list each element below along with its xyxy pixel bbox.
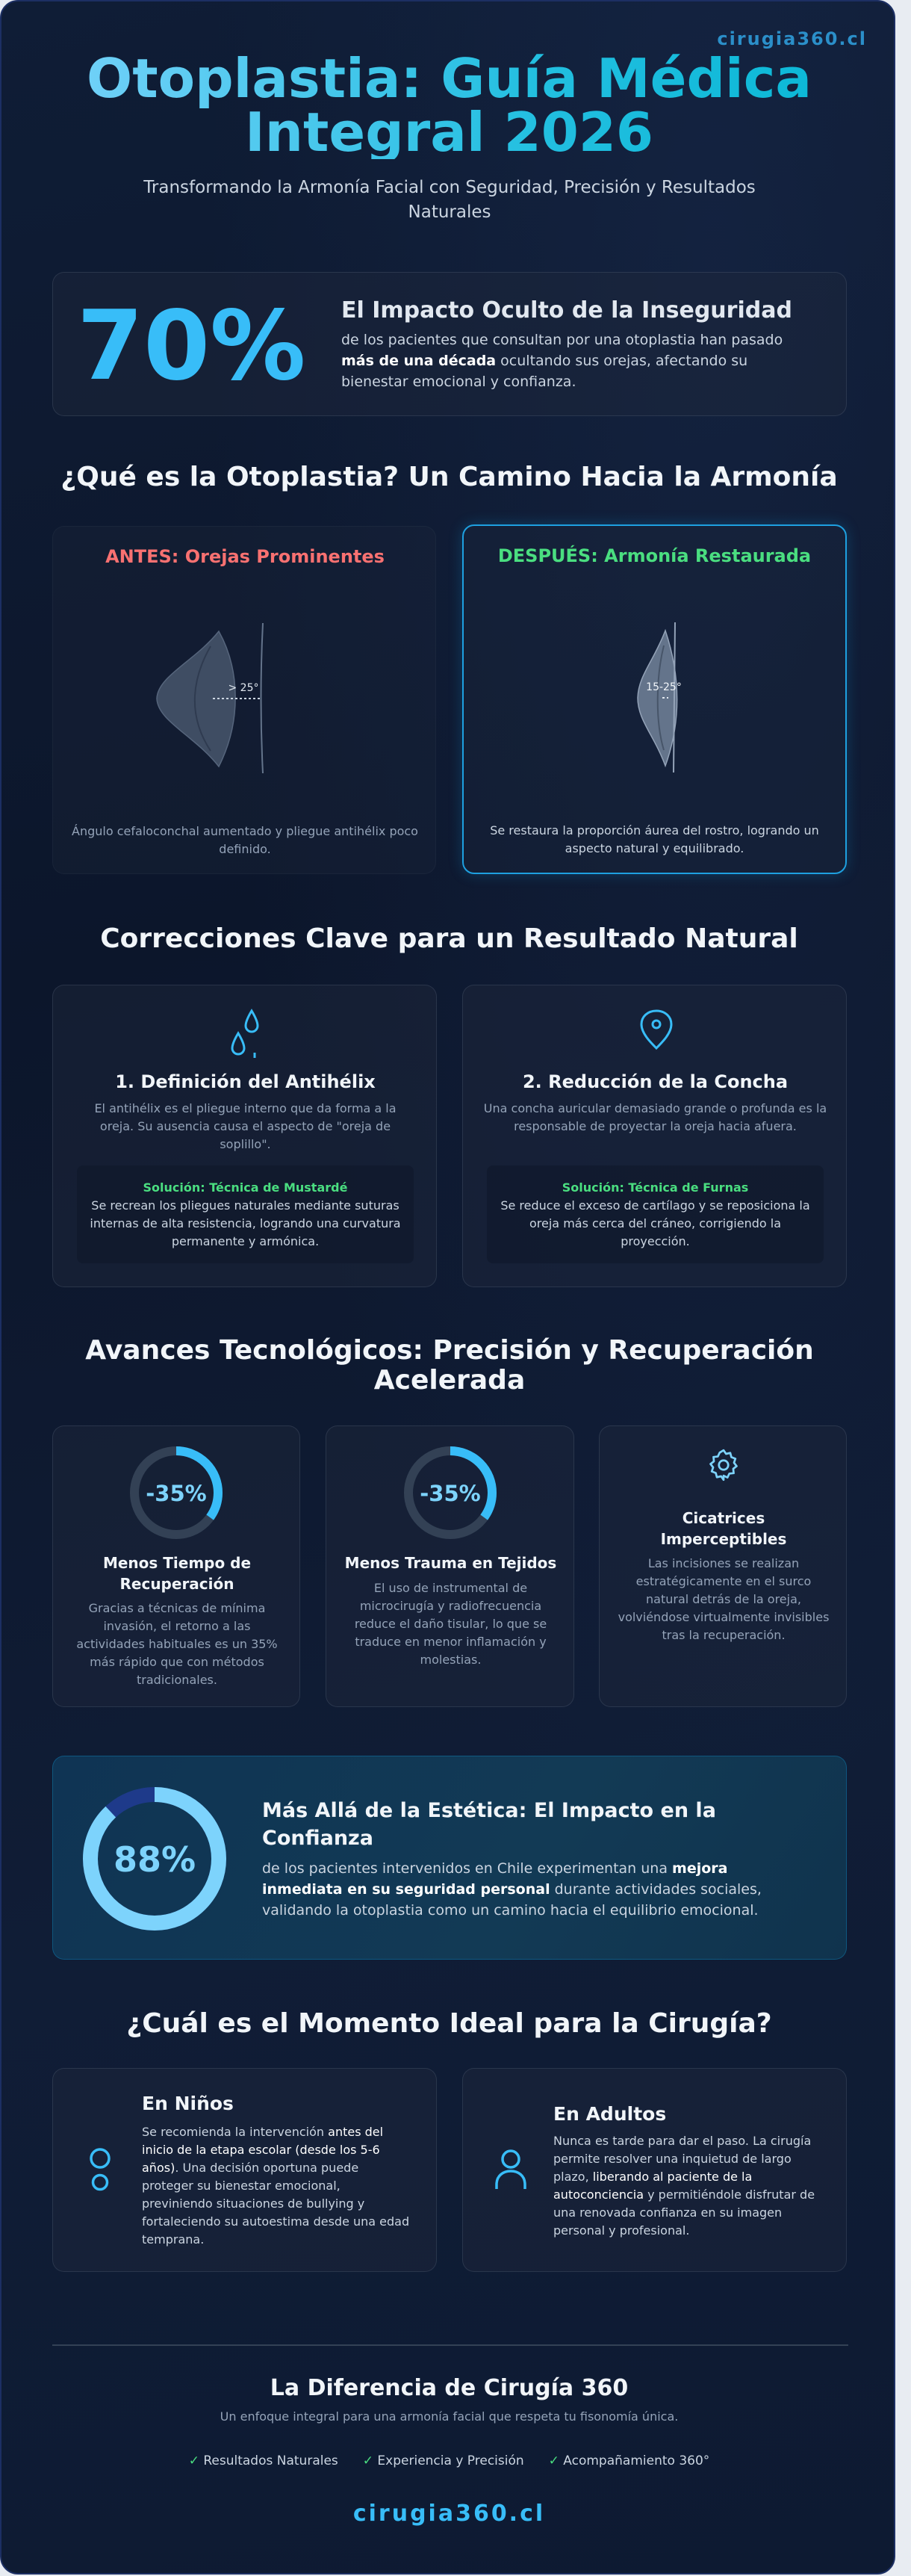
solution box [77, 1165, 414, 1263]
panel: 88% confianza [52, 1756, 847, 1960]
icon: child [90, 2148, 111, 2190]
panel: adultos [462, 2068, 847, 2272]
title [1, 52, 897, 159]
panel: cicatrices [599, 1425, 847, 1707]
despues heading: DESPUÉS: Armonía Restaurada [498, 545, 811, 566]
heading: correcciones: Correcciones Clave para un Resultado Natural [100, 923, 798, 954]
solution box: Se recrean los pliegues naturales mediante suturas internas de alta resistencia, logrando una curvatura permanente y armónica. [90, 1198, 401, 1248]
title: Más Allá de la Estética: El Impacto en la Confianza [262, 1799, 716, 1850]
title: Menos Trauma en Tejidos [345, 1554, 556, 1572]
heading: momento ideal: ¿Cuál es el Momento Ideal para la Cirugía? [126, 2008, 772, 2039]
donut 88% [83, 1787, 226, 1931]
icon: pin [641, 1010, 672, 1050]
donut -35% [130, 1446, 223, 1539]
icon: gear [709, 1449, 738, 1481]
ear diagram after: 15-25° [646, 681, 682, 693]
panel: antes [52, 526, 436, 874]
brand label top: cirugia360.cl [717, 28, 867, 49]
solution box: Solución: Técnica de Furnas [562, 1180, 748, 1195]
card heading: 1. Definición del Antihélix [115, 1071, 376, 1092]
card desc: El antihélix es el pliegue interno que da forma a la oreja. Su ausencia causa el aspecto de "oreja de soplillo". [94, 1101, 397, 1151]
card desc: Una concha auricular demasiado grande o profunda es la responsable de proyectar la oreja hacia afuera. [484, 1101, 827, 1133]
icon: adult [495, 2149, 526, 2189]
ear diagram before: > 25° [228, 682, 258, 694]
panel: stat 70% [52, 272, 847, 416]
donut -35%: -35% [420, 1481, 481, 1506]
stat heading: El Impacto Oculto de la Inseguridad [341, 297, 792, 323]
big number 70%: 70% [77, 291, 305, 402]
title: Menos Tiempo de Recuperación [103, 1554, 251, 1593]
antes heading: ANTES: Orejas Prominentes [105, 546, 385, 567]
panel: ninos [52, 2068, 437, 2272]
panel: tiempo recuperacion [52, 1425, 300, 1707]
title: Integral 2026 [245, 101, 653, 164]
footer heading: La Diferencia de Cirugía 360 [270, 2375, 628, 2401]
panel: concha [462, 985, 847, 1287]
solution box: Se reduce el exceso de cartílago y se reposiciona la oreja más cerca del cráneo, corrigiendo la proyección. [500, 1198, 810, 1248]
despues caption: Se restaura la proporción áurea del rostro, logrando un aspecto natural y equilibrado. [490, 823, 819, 855]
ear diagram before [156, 623, 264, 773]
text: de los pacientes intervenidos en Chile experimentan una mejora inmediata en su seguridad personal durante actividades sociales, validando la otoplastia como un camino hacia el equilibrio emocional. [262, 1860, 762, 1919]
ear diagram after [637, 622, 682, 773]
donut -35% [404, 1446, 497, 1539]
donut 88%: 88% [114, 1839, 196, 1880]
footer subtitle: Un enfoque integral para una armonía facial que respeta tu fisonomía única. [220, 2409, 678, 2424]
text: Nunca es tarde para dar el paso. La cirugía permite resolver una inquietud de largo plazo, liberando al paciente de la autoconciencia y permitiéndole disfrutar de una renovada confianza en su imagen personal y profesional. [553, 2134, 815, 2238]
stat text: de los pacientes que consultan por una otoplastia han pasado más de una década ocultando sus orejas, afectando su bienestar emocional y confianza. [341, 332, 783, 390]
title: Cicatrices Imperceptibles [661, 1509, 786, 1548]
donut -35%: -35% [146, 1481, 207, 1506]
title: En Niños [142, 2093, 234, 2114]
heading: avances: Avances Tecnológicos: Precisión y Recuperación Acelerada [85, 1335, 814, 1396]
footer brand: cirugia360.cl [353, 2501, 545, 2527]
solution box: Solución: Técnica de Mustardé [143, 1180, 347, 1195]
desc: Las incisiones se realizan estratégicamente en el surco natural detrás de la oreja, volviéndose virtualmente invisibles tras la recuperación. [618, 1556, 829, 1642]
desc: El uso de instrumental de microcirugía y radiofrecuencia reduce el daño tisular, lo que se traduce en menor inflamación y molestias. [355, 1581, 547, 1667]
text: Se recomienda la intervención antes del inicio de la etapa escolar (desde los 5-6 años). Una decisión oportuna puede proteger su bienestar emocional, previniendo situaciones de bullying y fortaleciendo su autoestima desde una edad temprana. [142, 2125, 409, 2247]
title: Otoplastia: Guía Médica [87, 47, 812, 110]
solution box [487, 1165, 824, 1263]
desc: Gracias a técnicas de mínima invasión, el retorno a las actividades habituales es un 35% más rápido que con métodos tradicionales. [76, 1601, 278, 1687]
footer checklist: ✓ Resultados Naturales ✓ Experiencia y Precisión ✓ Acompañamiento 360° [189, 2453, 709, 2468]
card heading: 2. Reducción de la Concha [523, 1071, 788, 1092]
panel: antihelix [52, 985, 437, 1287]
panel: trauma [326, 1425, 574, 1707]
title: En Adultos [553, 2103, 666, 2125]
icon: drops [231, 1009, 258, 1058]
heading: que es: ¿Qué es la Otoplastia? Un Camino Hacia la Armonía [60, 462, 838, 492]
panel: despues [462, 524, 847, 874]
antes caption: Ángulo cefaloconchal aumentado y pliegue antihélix poco definido. [72, 824, 418, 856]
subtitle: Transformando la Armonía Facial con Seguridad, Precisión y Resultados Naturales [143, 178, 756, 222]
